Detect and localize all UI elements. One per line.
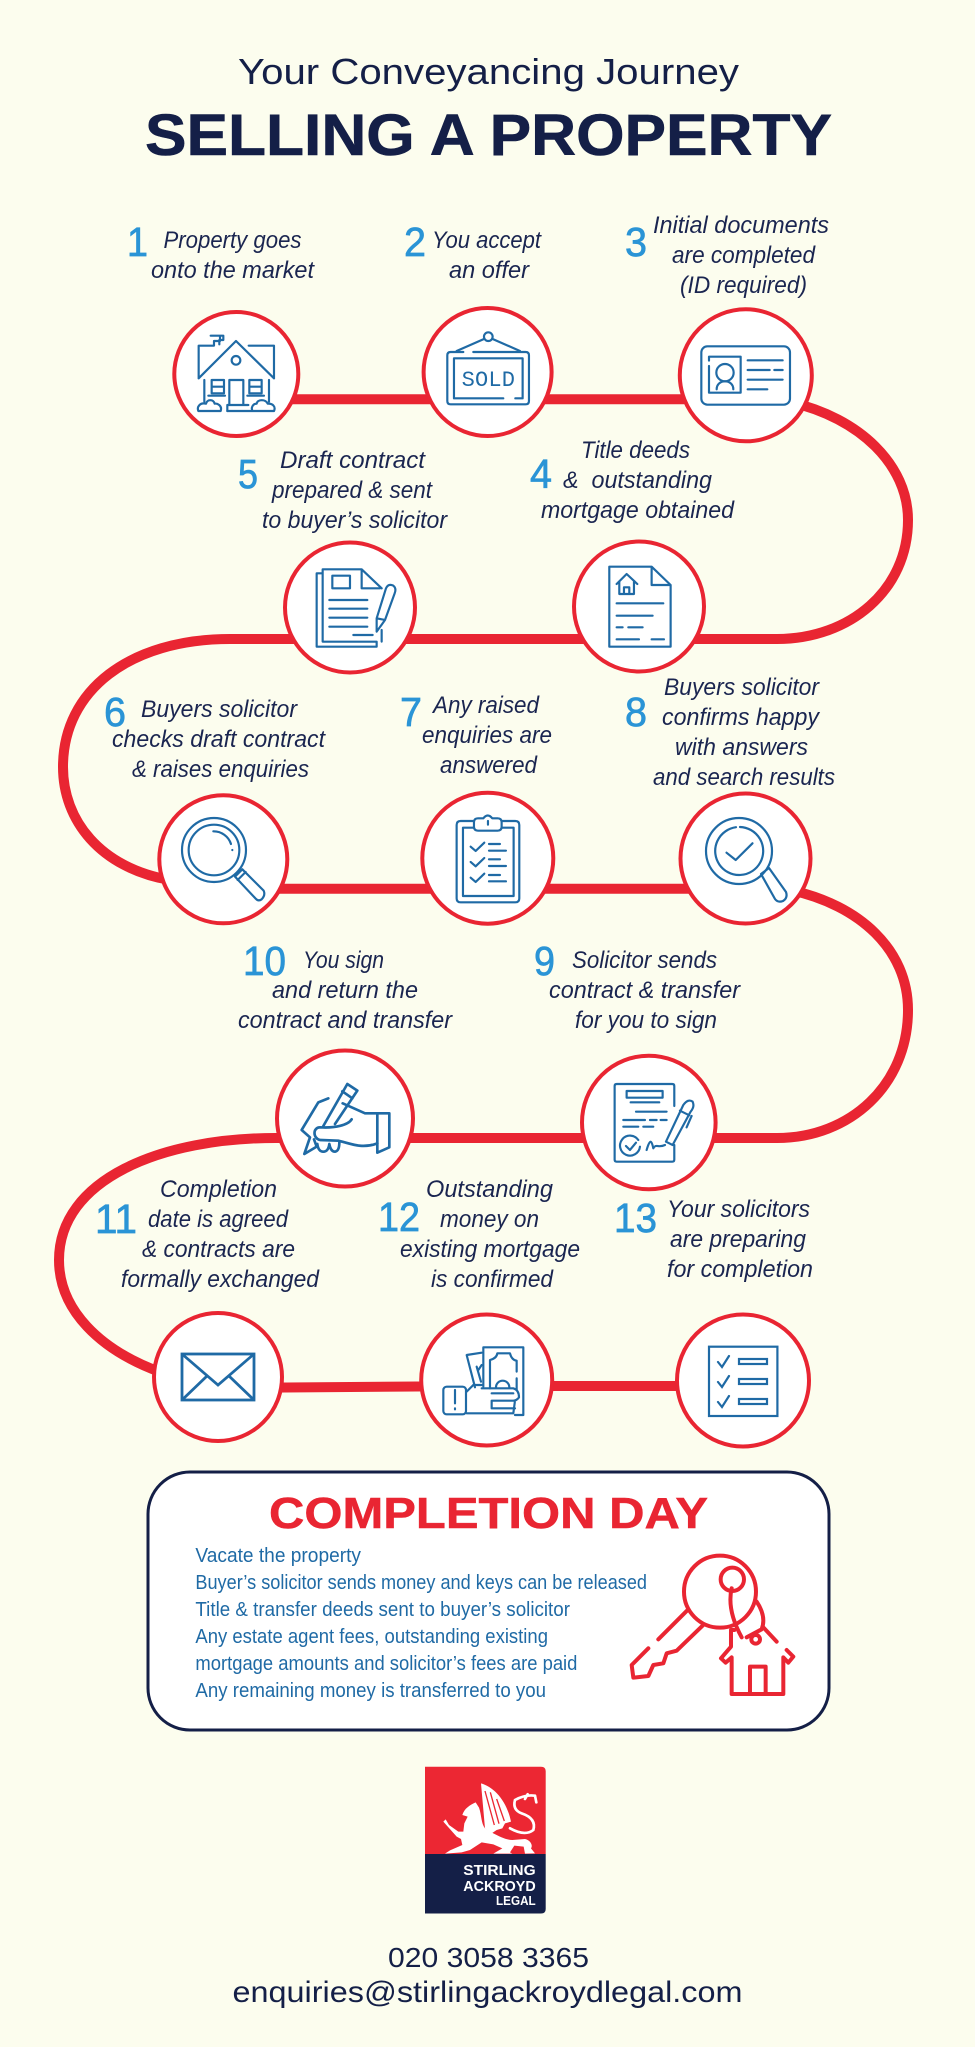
step 9 text: [534, 938, 741, 1034]
griffin emblem: [443, 1783, 536, 1854]
panel: completion day: [148, 1472, 829, 1730]
completion list: Vacate the property: [195, 1545, 361, 1567]
step 8 text: with answers: [675, 734, 808, 761]
step 12 text: [378, 1176, 580, 1293]
icon: title deeds: [574, 542, 704, 672]
step 13 text: [614, 1195, 813, 1283]
step 12 text: 12: [378, 1194, 420, 1240]
icon: id card: [680, 309, 812, 441]
completion list: mortgage amounts and solicitor’s fees are paid: [195, 1653, 577, 1675]
step 5 text: [238, 447, 448, 534]
step 4 text: mortgage obtained: [541, 497, 735, 524]
step 5 text: 5: [238, 451, 258, 497]
icon: magnifying glass with tick: [680, 794, 810, 924]
step 10 text: 10: [243, 938, 286, 984]
step 8 text: [625, 674, 835, 791]
step 4 text: 4: [530, 451, 552, 497]
logo: stirling ackroyd legal: [425, 1767, 546, 1914]
step 4 text: & outstanding: [563, 467, 713, 494]
icon: signed contract: [582, 1056, 716, 1189]
step 13 text: for completion: [667, 1256, 813, 1283]
step 3 text: 3: [625, 219, 647, 265]
step 13 text: Your solicitors: [667, 1196, 810, 1223]
step 7 text: [400, 689, 552, 779]
step 6 text: & raises enquiries: [132, 756, 309, 783]
step 5 text: to buyer’s solicitor: [262, 507, 448, 534]
title: SELLING A PROPERTY: [145, 103, 832, 168]
icon: magnifying glass: [159, 795, 287, 923]
icon: house: [174, 312, 298, 436]
icon: sold sign: SOLD: [462, 368, 515, 393]
icon: sold sign: [424, 308, 552, 436]
step 4 text: [530, 437, 735, 524]
step 12 text: money on: [440, 1206, 539, 1233]
step 7 text: enquiries are: [422, 722, 552, 749]
step 9 text: Solicitor sends: [572, 947, 717, 974]
step 12 text: is confirmed: [431, 1266, 554, 1293]
step 11 text: formally exchanged: [121, 1266, 320, 1293]
icon: keys and house keyring: [632, 1556, 793, 1694]
step 11 text: Completion: [160, 1176, 277, 1203]
step 11 text: & contracts are: [142, 1236, 295, 1263]
step 6 text: checks draft contract: [112, 726, 326, 753]
step 2 text: 2: [404, 219, 426, 265]
logo wordmark: STIRLING: [463, 1862, 536, 1879]
step 8 text: confirms happy: [662, 704, 821, 731]
step 3 text: [625, 212, 829, 299]
step 9 text: 9: [534, 938, 555, 984]
title: Your Conveyancing Journey: [238, 51, 739, 92]
step 4 text: Title deeds: [581, 437, 690, 464]
step 1 text: onto the market: [151, 257, 315, 284]
step 8 text: 8: [625, 689, 647, 735]
step 9 text: contract & transfer: [549, 977, 741, 1004]
icon: final checklist: [677, 1314, 809, 1446]
icon: hand signing: [277, 1050, 413, 1186]
icon: draft document: [285, 542, 415, 672]
icon: envelope: [154, 1313, 282, 1441]
step 3 text: (ID required): [680, 272, 807, 299]
logo wordmark: LEGAL: [496, 1893, 536, 1908]
step 2 text: [404, 219, 542, 284]
step 7 text: Any raised: [431, 692, 540, 719]
completion list: Title & transfer deeds sent to buyer’s solicitor: [195, 1599, 570, 1621]
step 11 text: [95, 1176, 320, 1293]
logo wordmark: ACKROYD: [463, 1878, 536, 1895]
step 12 text: existing mortgage: [400, 1236, 580, 1263]
title: [145, 51, 832, 168]
step 10 text: and return the: [272, 977, 418, 1004]
step 6 text: Buyers solicitor: [141, 696, 298, 723]
step 8 text: Buyers solicitor: [664, 674, 820, 701]
contact details: enquiries@stirlingackroydlegal.com: [232, 1976, 742, 2009]
logo wordmark: [463, 1862, 536, 1908]
step 7 text: answered: [440, 752, 538, 779]
completion list: Any remaining money is transferred to you: [195, 1680, 546, 1702]
step 11 text: 11: [95, 1196, 137, 1242]
step 11 text: date is agreed: [148, 1206, 289, 1233]
step 12 text: Outstanding: [426, 1176, 554, 1203]
step 1 text: [127, 219, 315, 284]
step 2 text: You accept: [432, 227, 542, 254]
icon: hand holding money: [421, 1314, 552, 1446]
step 13 text: 13: [614, 1195, 657, 1241]
step 10 text: contract and transfer: [238, 1007, 453, 1034]
step 5 text: prepared & sent: [271, 477, 433, 504]
step 6 text: [104, 689, 326, 783]
step 9 text: for you to sign: [575, 1007, 717, 1034]
completion list: Any estate agent fees, outstanding existing: [195, 1626, 548, 1648]
contact details: [232, 1942, 742, 2009]
step 2 text: an offer: [449, 257, 530, 284]
step 13 text: are preparing: [670, 1226, 807, 1253]
step 3 text: are completed: [672, 242, 816, 269]
step 1 text: Property goes: [164, 227, 302, 254]
step 6 text: 6: [104, 689, 126, 735]
step 10 text: [238, 938, 453, 1034]
completion list: Buyer’s solicitor sends money and keys can be released: [195, 1572, 647, 1594]
step 1 text: 1: [127, 219, 148, 265]
step 7 text: 7: [400, 689, 422, 735]
completion heading: COMPLETION DAY: [269, 1489, 708, 1538]
step 3 text: Initial documents: [653, 212, 829, 239]
journey path: [59, 399, 908, 1388]
icon: clipboard checklist: [422, 793, 553, 924]
completion list: [195, 1545, 647, 1702]
step 8 text: and search results: [653, 764, 835, 791]
contact details: 020 3058 3365: [388, 1942, 589, 1973]
step 10 text: You sign: [303, 947, 384, 974]
step 5 text: Draft contract: [280, 447, 426, 474]
